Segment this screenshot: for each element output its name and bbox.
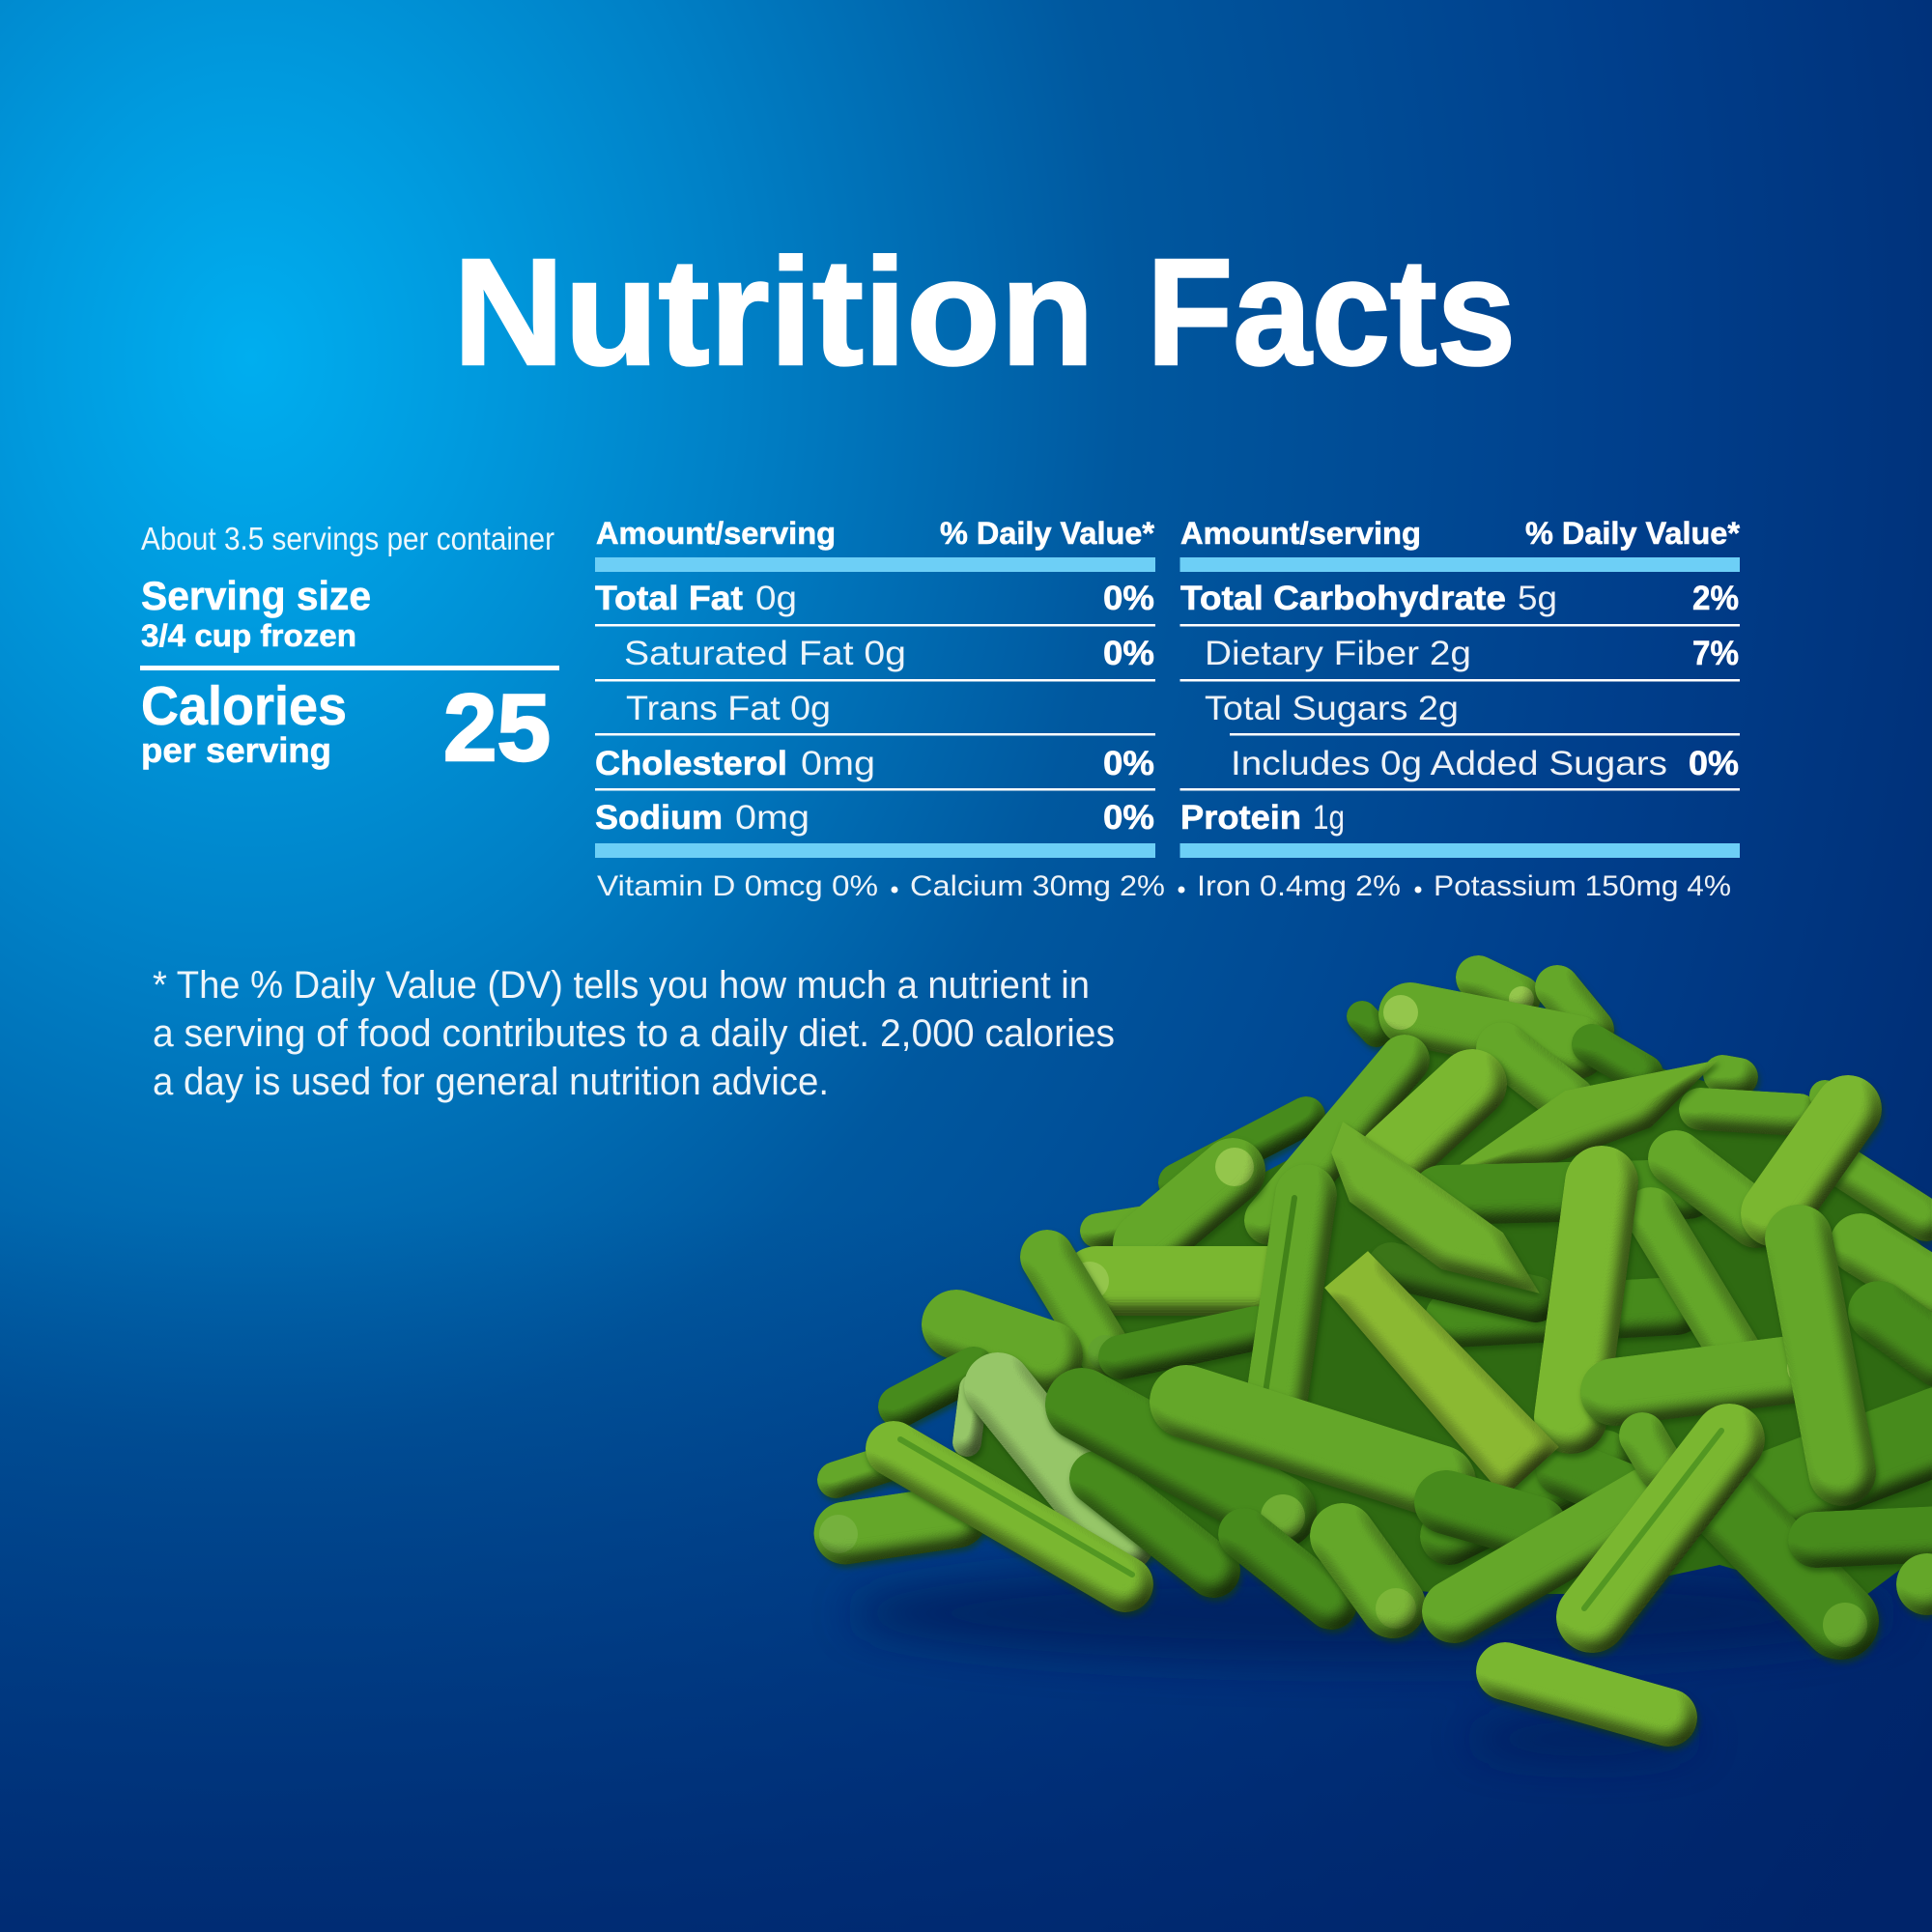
bean [1343,1536,1416,1629]
table header: % Daily Value* [940,516,1155,551]
top bar [595,557,1155,572]
bean [1047,1257,1122,1370]
illustration: pile of green beans [819,978,1932,1718]
table header: Amount/serving [596,516,836,551]
bean [819,1515,956,1553]
bean [1244,1534,1331,1604]
bean [1446,1502,1536,1528]
bean [1441,1189,1688,1195]
bean [1478,978,1534,1011]
filler bean [1304,1439,1420,1478]
servings per container: About 3.5 servings per container [141,521,554,556]
bean [1502,1048,1570,1101]
row: total carbohydrate [1180,580,1739,617]
vitamins and minerals line: Calcium 30mg 2% [910,870,1165,902]
row: saturated fat: Saturated Fat 0g [624,635,906,672]
bean [1879,1312,1932,1357]
bean: large flat piece [1324,1251,1559,1497]
vitamins and minerals line: Vitamin D 0mcg 0% [597,870,878,902]
row: sodium [595,799,1154,837]
bean [1264,1195,1306,1410]
bottom bar [595,843,1155,858]
row: cholesterol: Cholesterol [595,745,787,782]
row: dietary fiber: 7% [1692,635,1739,672]
bean [1392,1084,1472,1158]
row: total fat: 0% [1103,580,1154,617]
bean [956,1324,1048,1355]
background lower shading [0,1208,1932,1932]
serving size: Serving size [141,573,371,618]
row: protein: 1g [1313,799,1345,837]
footnote [153,964,1115,1103]
bean [1584,1431,1729,1617]
bean [1082,1405,1305,1539]
row: sodium: 0mg [735,799,810,837]
bean [1614,1350,1824,1392]
row: sodium: Sodium [595,799,723,837]
bean [1454,1306,1676,1319]
bean: isolated front piece [1505,1671,1668,1718]
bean [1383,995,1577,1047]
bean [1121,1328,1256,1357]
row: cholesterol: 0% [1103,745,1154,782]
bean [1592,1044,1643,1074]
bean [1642,1435,1662,1468]
bean [1825,1095,1839,1111]
bean [1816,1150,1926,1220]
per serving: per serving [141,730,331,770]
bean [1775,1109,1848,1213]
top bar [1180,557,1740,572]
bean [998,1386,1122,1540]
row: total fat [595,580,1154,617]
row: dietary fiber [1205,635,1739,672]
bean [1861,1244,1932,1294]
bean [1454,1499,1647,1611]
bean [1571,1182,1602,1417]
panel: serving and calories [140,521,559,781]
shadow under beans [850,1565,1893,1758]
row: total sugars: Total Sugars 2g [1205,690,1459,727]
filler bean [1449,1459,1604,1536]
row: cholesterol: 0mg [801,745,875,782]
bean [1557,987,1592,1030]
bean [1816,1534,1932,1540]
row: protein: Protein [1180,799,1301,837]
footnote: a serving of food contributes to a daily diet. 2,000 calories [153,1012,1115,1055]
vitamins and minerals line [597,870,1731,902]
filler bean [1565,1468,1662,1507]
title: Nutrition [453,228,1094,397]
calories label: Calories [141,675,347,737]
row: saturated fat: 0% [1103,635,1154,672]
bean [1651,1213,1737,1355]
bean: pointed pod [1331,1122,1540,1293]
title [453,228,1516,397]
table header: % Daily Value* [1525,516,1741,551]
bean [1097,1220,1163,1231]
filler bean [1391,1265,1536,1299]
bean [1178,1116,1306,1182]
bean [967,1388,974,1442]
bean [1146,1148,1254,1244]
divider [140,666,559,670]
pile dark mass [927,1014,1932,1604]
serving amount: 3/4 cup frozen [141,618,356,653]
bean [894,1439,1132,1584]
bean [1896,1553,1932,1615]
table header [596,516,1155,551]
bean [1096,1478,1213,1571]
bean [1700,1109,1799,1115]
footnote: * The % Daily Value (DV) tells you how much a nutrient in [153,964,1090,1007]
bean [1362,1016,1377,1032]
row: total carbohydrate: 2% [1692,580,1739,617]
bean [1722,1074,1739,1077]
row: trans fat: Trans Fat 0g [626,690,831,727]
bottom bar [1180,843,1740,858]
table header [1180,516,1741,551]
row: saturated fat [624,635,1154,672]
bean [1739,1430,1932,1507]
row: total carbohydrate: 5g [1518,580,1557,617]
footnote: a day is used for general nutrition advice. [153,1061,829,1103]
bean [836,1460,899,1480]
title: Facts [1147,228,1516,397]
bean: pointed pod [1451,1060,1719,1171]
vitamins and minerals line: Iron 0.4mg 2% [1197,870,1401,902]
row: dietary fiber: Dietary Fiber 2g [1205,635,1471,672]
row: total fat: 0g [755,580,797,617]
row: cholesterol [595,745,1154,782]
bean [1725,1503,1867,1647]
row: total fat: Total Fat [595,580,743,617]
table header: Amount/serving [1180,516,1421,551]
bean [1799,1238,1842,1472]
vitamins and minerals line: Potassium 150mg 4% [1434,870,1731,902]
bean [899,1368,974,1406]
bean [1070,1262,1269,1300]
bean [1269,1060,1405,1220]
bean [1186,1402,1439,1482]
row: added sugars: 0% [1689,745,1739,782]
panel: right nutrient table [1180,516,1741,858]
calories value: 25 [443,674,551,781]
bean [1676,1158,1771,1235]
row: sodium: 0% [1103,799,1154,837]
panel: left nutrient table [595,516,1155,858]
row: total carbohydrate: Total Carbohydrate [1180,580,1506,617]
row: added sugars: Includes 0g Added Sugars [1231,745,1667,782]
